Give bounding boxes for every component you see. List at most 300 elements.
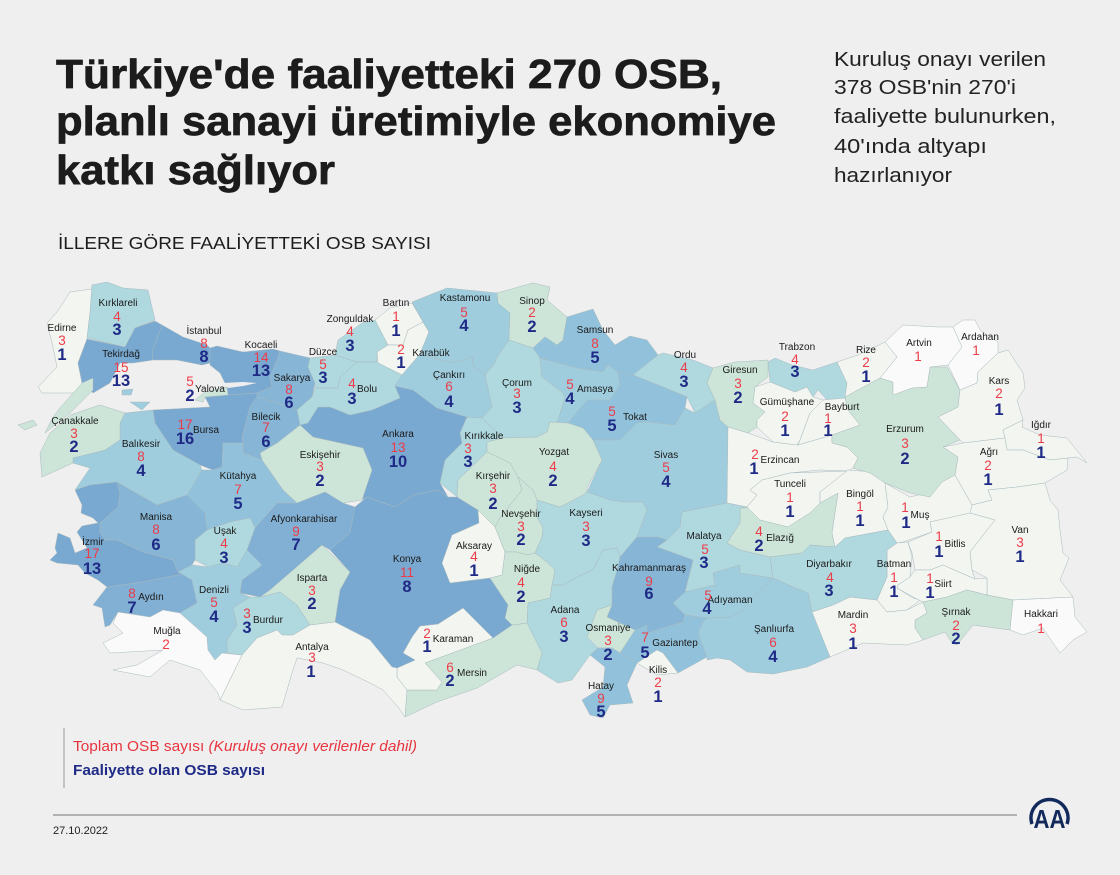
province: Erzurum [832, 367, 960, 497]
label: Bursa: 16 [176, 430, 194, 448]
summary text: faaliyette bulunurken, [834, 105, 1056, 128]
label: Diyarbakır: Diyarbakır [806, 559, 852, 570]
summary text: Kuruluş onayı verilen [834, 48, 1046, 71]
label: Amasya: Amasya [577, 384, 613, 395]
label: Siirt [925, 571, 952, 602]
label: İzmir: 13 [83, 560, 101, 578]
label: Amasya [565, 377, 613, 408]
label: Mersin: Mersin [457, 668, 487, 679]
label: Kırıkkale: 3 [464, 441, 472, 456]
label: Siirt: 1 [925, 584, 935, 602]
label: Trabzon: 4 [791, 352, 799, 367]
province: Bayburt [798, 398, 860, 445]
province: Elazığ [727, 493, 838, 557]
label: Kırıkkale: 3 [463, 453, 473, 471]
label: Yalova: Yalova [195, 384, 225, 395]
label: Kırıkkale [463, 431, 504, 471]
label: Kilis: 2 [654, 675, 662, 690]
label: Edirne: 3 [58, 333, 66, 348]
province: Malatya [657, 503, 773, 592]
label: Denizli [199, 585, 229, 626]
map subheading: İLLERE GÖRE FAALİYETTEKİ OSB SAYISI [58, 233, 431, 253]
label: Kars [989, 376, 1009, 419]
label: Kırşehir [476, 471, 511, 513]
label: Çanakkale [51, 416, 99, 456]
province: Kilis [637, 650, 678, 675]
label: Sinop: 2 [528, 305, 536, 320]
label: Gaziantep: Gaziantep [652, 638, 698, 649]
label: Ağrı: 1 [983, 471, 993, 489]
label: Erzincan: 1 [749, 460, 759, 478]
label: Bayburt: 1 [823, 422, 833, 440]
label: Tekirdağ [102, 349, 140, 390]
label: Kütahya: 5 [233, 495, 243, 513]
province: Ağrı [943, 438, 1068, 505]
label: Gümüşhane [760, 397, 815, 440]
label: Zonguldak [327, 314, 374, 355]
label: Denizli: 5 [210, 595, 218, 610]
label: Kahramanmaraş: 9 [645, 574, 653, 589]
province: Sivas [587, 400, 728, 540]
label: Mardin [838, 610, 868, 653]
province: Çorum [482, 340, 565, 438]
label: Nevşehir: 3 [517, 519, 525, 534]
label: Aksaray [456, 541, 492, 580]
label: Manisa [140, 512, 173, 554]
label: Aksaray: 4 [470, 549, 478, 564]
label: Karaman: 1 [422, 638, 432, 656]
label: Iğdır: 1 [1037, 431, 1045, 446]
label: Manisa: Manisa [140, 512, 173, 523]
label: Bilecik: 7 [262, 420, 270, 435]
label: Bingöl: Bingöl [846, 489, 874, 500]
label: Şanlıurfa: 4 [768, 648, 778, 666]
province: Adana [527, 548, 620, 683]
label: Ordu: 4 [680, 360, 688, 375]
label: Hakkari [1024, 609, 1058, 636]
label: Tunceli: 1 [785, 503, 795, 521]
label: Van: 3 [1016, 535, 1024, 550]
label: Sakarya: 6 [284, 394, 294, 412]
label: Şırnak: 2 [952, 618, 960, 633]
label: Karabük [396, 342, 451, 372]
label: Muğla [153, 626, 181, 652]
label: Mersin [445, 660, 487, 690]
province: Yozgat [487, 422, 602, 507]
sea: İzmit gulf [223, 382, 257, 388]
province: Kütahya [187, 443, 297, 530]
label: Eskişehir: Eskişehir [300, 450, 341, 461]
province: Hakkari [1010, 597, 1087, 653]
label: Iğdır: 1 [1036, 444, 1046, 462]
label: Ağrı [980, 447, 998, 489]
province: Balıkesir [73, 410, 202, 505]
province: Çanakkale [40, 405, 125, 477]
province: Van [970, 483, 1073, 600]
label: Samsun: 8 [591, 336, 599, 351]
province: Erzincan [727, 427, 858, 507]
label: Eskişehir [300, 450, 341, 490]
label: Çorum [502, 378, 532, 417]
label: Bilecik: 6 [261, 433, 271, 451]
label: Burdur: Burdur [253, 615, 284, 626]
label: Yalova: 5 [186, 374, 194, 389]
label: Ağrı: Ağrı [980, 447, 998, 458]
label: Rize [856, 345, 876, 386]
province: Denizli [178, 550, 262, 660]
label: Diyarbakır [806, 559, 852, 600]
label: Tekirdağ: 13 [112, 372, 130, 390]
label: Ankara: 10 [389, 453, 407, 471]
label: Amasya: 4 [565, 390, 575, 408]
label: Muş [901, 500, 929, 532]
label: Niğde: 2 [516, 588, 526, 606]
label: Gaziantep [640, 630, 698, 662]
province: Sinop [497, 283, 567, 348]
label: Sivas: 4 [661, 473, 671, 491]
label: Ankara [382, 429, 414, 471]
label: Isparta: Isparta [297, 573, 328, 584]
label: Kilis: Kilis [649, 665, 667, 676]
label: Ordu: Ordu [674, 350, 696, 361]
label: İstanbul: 8 [200, 336, 208, 351]
province: Ankara [300, 386, 467, 507]
label: Aksaray: 1 [469, 562, 479, 580]
title: planlı sanayi üretimiyle ekonomiye [56, 98, 776, 144]
label: Samsun: Samsun [577, 325, 613, 336]
label: Çankırı: Çankırı [433, 370, 465, 381]
label: Manisa: 8 [152, 522, 160, 537]
label: Trabzon [779, 342, 815, 381]
province: Tunceli [747, 471, 848, 527]
province: Rize [837, 342, 897, 397]
label: Kayseri: Kayseri [569, 508, 603, 519]
label: Kayseri: 3 [582, 519, 590, 534]
label: Şanlıurfa: 6 [769, 635, 777, 650]
label: Zonguldak: 3 [345, 337, 355, 355]
label: Yozgat: Yozgat [539, 447, 569, 458]
province: Bilecik [242, 397, 300, 460]
label: Karaman [422, 626, 473, 656]
label: Konya: 11 [400, 565, 414, 580]
label: İzmir: 17 [84, 546, 100, 561]
label: Muş: Muş [911, 510, 929, 521]
province: Marmara Adası, Balıkesir [122, 389, 133, 395]
label: Antalya: 1 [306, 663, 316, 681]
label: Aydın: Aydın [138, 592, 164, 603]
label: Aksaray: Aksaray [456, 541, 492, 552]
label: Şırnak: Şırnak [942, 607, 971, 618]
label: Şanlıurfa: Şanlıurfa [754, 624, 794, 635]
province labels [48, 293, 1058, 721]
label: Bitlis: Bitlis [944, 539, 966, 550]
label: İzmir: İzmir [82, 535, 104, 548]
label: Malatya: 3 [699, 554, 709, 572]
label: Artvin: 1 [914, 349, 922, 364]
province: Çankırı [395, 354, 492, 418]
label: Osmaniye: 2 [603, 646, 613, 664]
province: Gökçeada, Çanakkale [18, 420, 37, 430]
label: Uşak [214, 526, 237, 567]
label: Ankara: Ankara [382, 429, 414, 440]
label: Çorum: 3 [513, 386, 521, 401]
label: Tokat [607, 404, 647, 435]
province: Kırklareli [87, 282, 155, 347]
label: Eskişehir: 2 [315, 472, 325, 490]
province: Mersin [405, 623, 542, 717]
province: Kırşehir [457, 452, 522, 527]
province: Burdur [227, 592, 310, 655]
footer rule [53, 814, 1017, 816]
title: katkı sağlıyor [56, 147, 335, 193]
summary text [834, 48, 1056, 187]
label: Sivas: 5 [662, 460, 670, 475]
province: Eskişehir [260, 425, 372, 503]
province: Zonguldak [335, 320, 388, 362]
label: Gümüşhane: 2 [781, 409, 789, 424]
label: Edirne [48, 323, 77, 364]
label: Nevşehir [501, 509, 541, 549]
label: Kütahya [220, 471, 257, 513]
legend [64, 728, 417, 788]
province: Diyarbakır [770, 530, 897, 612]
label: Giresun: 3 [734, 376, 742, 391]
label: Kocaeli: 13 [252, 362, 270, 380]
label: Sinop: Sinop [519, 296, 545, 307]
label: Batman [877, 559, 911, 601]
label: Osmaniye: Osmaniye [585, 623, 631, 634]
label: İstanbul [186, 324, 222, 366]
label: Burdur: 3 [243, 606, 251, 621]
province: Muş [883, 475, 972, 543]
province: Artvin [880, 325, 962, 395]
province: Aksaray [442, 510, 505, 583]
label: Nevşehir: Nevşehir [501, 509, 541, 520]
label: Uşak: Uşak [214, 526, 237, 537]
label: Hatay: 5 [596, 703, 606, 721]
label: Batman: 1 [889, 583, 899, 601]
label: Bayburt: Bayburt [825, 402, 859, 413]
label: Ağrı: 2 [984, 458, 992, 473]
label: Bolu [347, 376, 377, 408]
label: Çanakkale: Çanakkale [51, 416, 99, 427]
label: Artvin [906, 338, 932, 364]
label: Yalova [185, 374, 225, 405]
province: Bingöl [820, 470, 888, 547]
label: Gaziantep: 5 [640, 644, 650, 662]
province: Iğdır [1003, 420, 1087, 463]
label: Konya: Konya [393, 554, 422, 565]
province: Edirne [38, 289, 92, 393]
label: Çankırı: 6 [445, 379, 453, 394]
province: Antalya [220, 622, 407, 717]
label: Gaziantep: 7 [641, 630, 649, 645]
province: Kocaeli [210, 346, 280, 395]
label: Düzce: 3 [318, 369, 328, 387]
label: İstanbul: İstanbul [186, 324, 222, 337]
label: Isparta [297, 573, 328, 613]
label: Bolu: Bolu [357, 384, 377, 395]
province: Kahramanmaraş [607, 537, 693, 633]
label: Adana [551, 605, 580, 646]
province: Amasya [540, 358, 620, 423]
province: Karabük [377, 322, 429, 375]
province: Tekirdağ [78, 321, 162, 393]
label: Kütahya: 7 [234, 482, 242, 497]
label: Tunceli: 1 [786, 490, 794, 505]
label: Elazığ: Elazığ [766, 533, 794, 544]
label: Kırıkkale: Kırıkkale [465, 431, 504, 442]
province: Bartın [375, 303, 423, 345]
province: Bitlis [908, 513, 995, 579]
label: Tunceli [774, 479, 806, 521]
province: Kırıkkale [440, 417, 503, 497]
label: Bitlis: 1 [935, 529, 943, 544]
label: Denizli: Denizli [199, 585, 229, 596]
label: Van [1011, 525, 1029, 566]
label: Zonguldak: 4 [346, 324, 354, 339]
label: Kastamonu: 4 [459, 317, 469, 335]
label: Malatya: Malatya [686, 531, 722, 542]
label: Amasya: 5 [566, 377, 574, 392]
label: Edirne: 1 [57, 346, 67, 364]
label: Afyonkarahisar: Afyonkarahisar [271, 514, 338, 525]
province: Bursa [153, 393, 257, 470]
label: Ardahan [961, 332, 999, 358]
label: Kilis [649, 665, 667, 706]
title: Türkiye'de faaliyetteki 270 OSB, [56, 51, 722, 97]
label: Eskişehir: 3 [316, 459, 324, 474]
label: Ordu [674, 350, 696, 391]
label: Bartın [383, 298, 409, 340]
label: Giresun: 2 [733, 389, 743, 407]
label: Bartın: Bartın [383, 298, 409, 309]
label: Batman: Batman [877, 559, 911, 570]
label: Kırşehir: Kırşehir [476, 471, 511, 482]
label: Kırklareli: 4 [113, 309, 121, 324]
label: Antalya: 3 [308, 650, 316, 665]
label: Bayburt [823, 402, 859, 440]
label: Bayburt: 1 [824, 411, 832, 426]
label: Giresun [722, 365, 758, 407]
province: Bolu [297, 362, 402, 425]
label: Antalya [295, 642, 329, 681]
province: Konya [330, 490, 512, 668]
label: Kırşehir: 3 [489, 481, 497, 496]
label: Bursa [176, 417, 219, 448]
label: Erzincan [749, 447, 799, 478]
label: Bingöl [846, 489, 874, 530]
date: 27.10.2022 [53, 825, 108, 837]
label: Elazığ [754, 524, 794, 555]
label: Niğde [514, 564, 540, 606]
label: Balıkesir: 8 [137, 449, 145, 464]
label: Karabük: 1 [396, 354, 406, 372]
label: Uşak: 4 [220, 536, 228, 551]
label: Adana: 6 [560, 615, 568, 630]
label: Bolu: 4 [348, 376, 356, 391]
label: Adana: 3 [559, 628, 569, 646]
label: Kahramanmaraş [612, 563, 686, 603]
label: Bilecik [252, 412, 281, 451]
label: Bilecik: Bilecik [252, 412, 281, 423]
province: Adıyaman [673, 565, 773, 618]
label: Erzincan: Erzincan [761, 455, 799, 466]
label: Osmaniye [585, 623, 631, 664]
summary text: 40'ında altyapı [834, 135, 987, 158]
label: İstanbul: 8 [199, 348, 209, 366]
label: Kocaeli: 14 [253, 350, 269, 365]
label: Yozgat: 2 [548, 472, 558, 490]
province: Samsun [533, 309, 658, 375]
label: Adıyaman: 5 [704, 588, 712, 603]
province: Gümüşhane [753, 382, 823, 445]
label: Trabzon: Trabzon [779, 342, 815, 353]
province: İzmir [50, 482, 188, 587]
province: Batman [877, 542, 920, 612]
province: Hatay [582, 648, 637, 718]
label: Düzce: Düzce [309, 347, 338, 358]
label: Kars: 1 [994, 401, 1004, 419]
label: Şırnak [942, 607, 971, 648]
label: Diyarbakır: 4 [826, 570, 834, 585]
label: Düzce: 5 [319, 357, 327, 372]
label: Bitlis [934, 529, 966, 561]
province: Karaman [397, 608, 493, 690]
label: Mardin: Mardin [838, 610, 868, 621]
label: Kocaeli: Kocaeli [245, 340, 277, 351]
label: Sinop [519, 296, 545, 336]
province: Mardin [812, 597, 927, 657]
label: Hatay: 9 [597, 691, 605, 706]
label: Erzurum: 3 [901, 436, 909, 451]
legend: total OSB: Toplam OSB sayısı (Kuruluş onayı verilenler dahil) [73, 739, 417, 755]
label: Rize: Rize [856, 345, 876, 356]
label: Sakarya: Sakarya [274, 373, 311, 384]
label: Kırşehir: 2 [488, 495, 498, 513]
label: Adıyaman: Adıyaman [707, 595, 753, 606]
label: Sivas: Sivas [654, 450, 678, 461]
label: Çanakkale: 2 [69, 438, 79, 456]
label: Çanakkale: 3 [70, 426, 78, 441]
label: Niğde: 4 [517, 575, 525, 590]
label: Yalova: 2 [185, 387, 195, 405]
label: Elazığ: 2 [754, 537, 764, 555]
label: Bursa: Bursa [193, 425, 219, 436]
icon: AA logo: AA [1034, 804, 1066, 834]
province: Gelibolu, Çanakkale [45, 378, 93, 433]
label: Çorum: Çorum [502, 378, 532, 389]
label: Ordu: 3 [679, 373, 689, 391]
label: Malatya: 5 [701, 542, 709, 557]
summary text: 378 OSB'nin 270'i [834, 76, 1016, 99]
label: Kayseri [569, 508, 603, 550]
label: Muş: 1 [901, 500, 909, 515]
label: Muğla: Muğla [153, 626, 181, 637]
label: Bursa: 17 [177, 417, 193, 432]
label: Tunceli: Tunceli [774, 479, 806, 490]
label: İzmir [82, 535, 104, 578]
label: Burdur [242, 606, 284, 637]
province: Şırnak [915, 590, 1013, 645]
province: Siirt [897, 565, 987, 602]
label: Hakkari: Hakkari [1024, 609, 1058, 620]
province: Gaziantep [620, 615, 707, 673]
summary text: hazırlanıyor [834, 164, 952, 187]
label: Hakkari: 1 [1037, 621, 1045, 636]
label: Kırklareli: Kırklareli [99, 298, 137, 309]
label: Kastamonu [440, 293, 490, 335]
